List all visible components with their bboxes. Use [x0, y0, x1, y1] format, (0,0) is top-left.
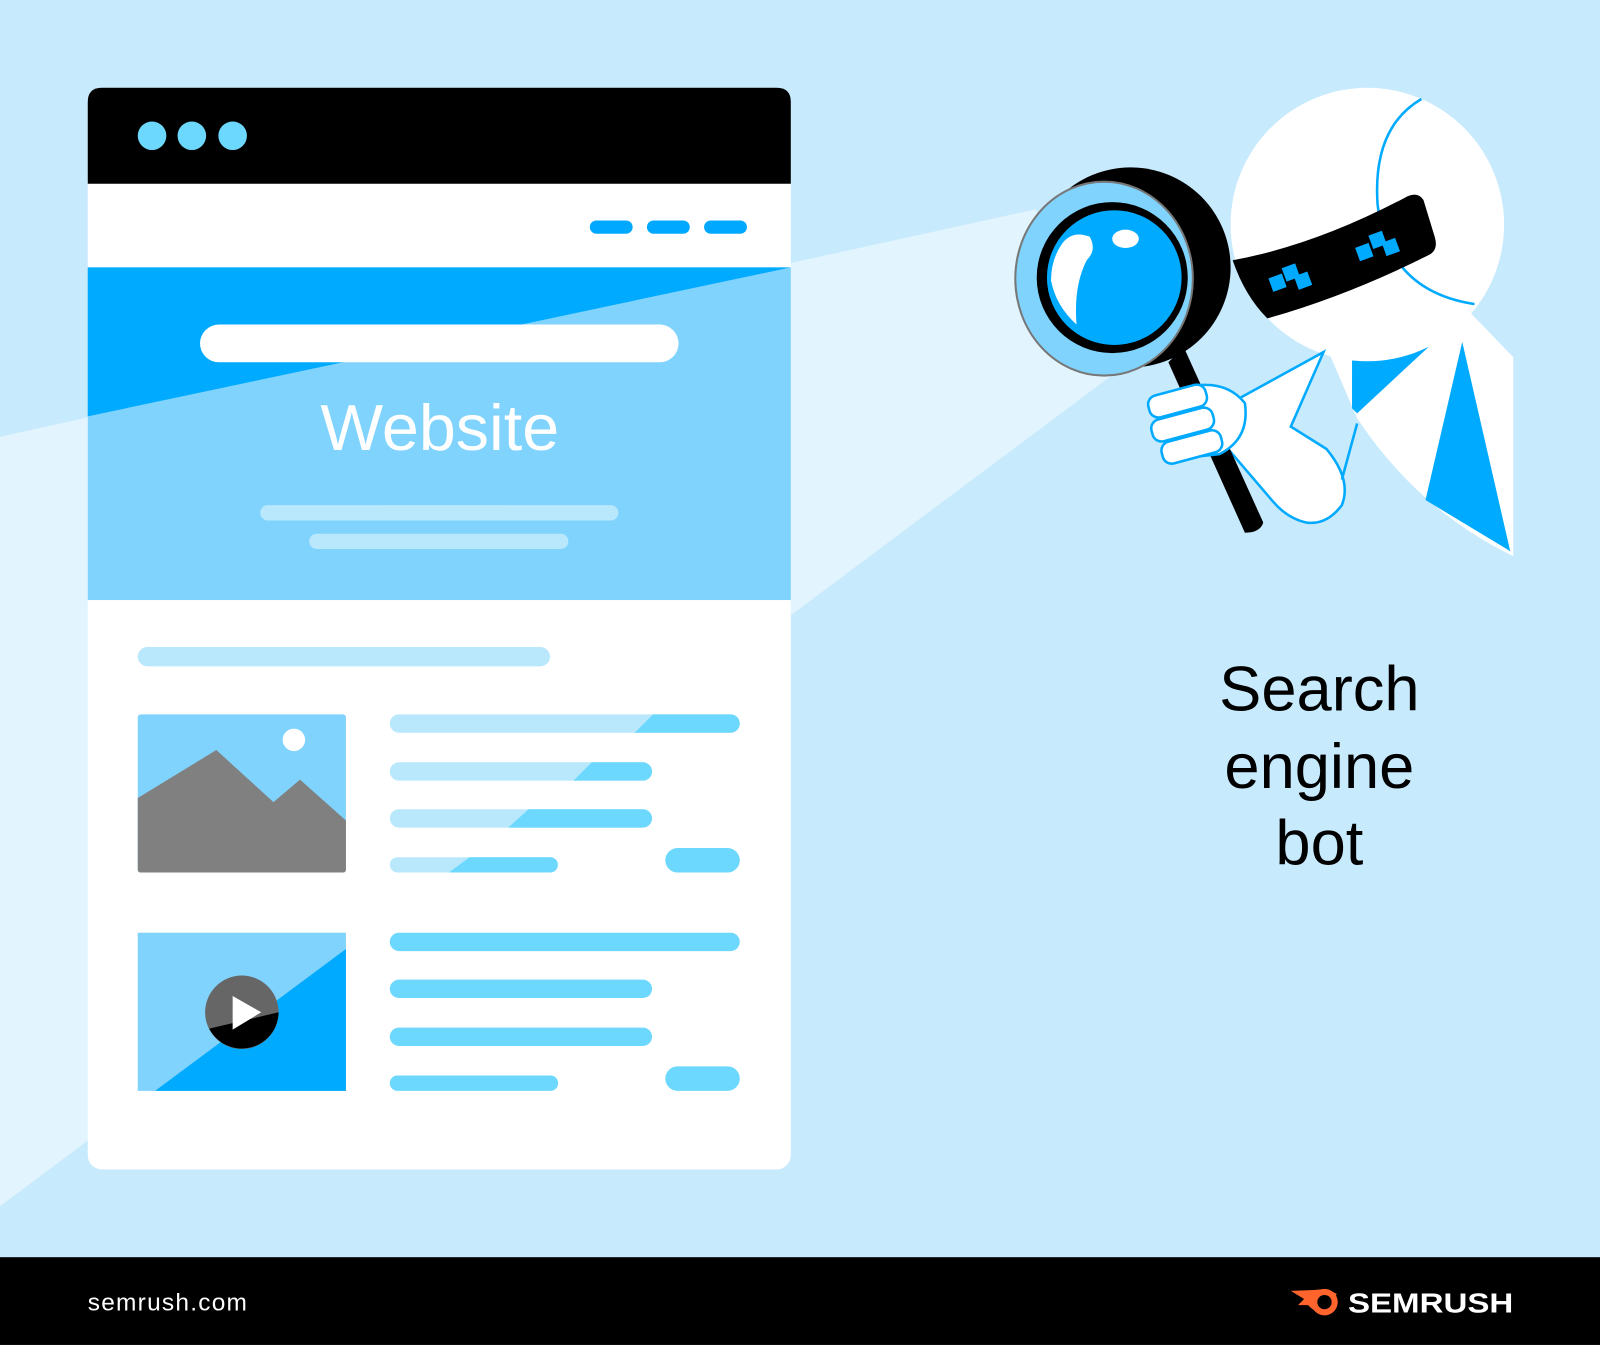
website browser window [88, 88, 791, 1169]
footer url: semrush.com [88, 1289, 247, 1316]
robot body [1327, 301, 1513, 556]
semrush logo: SEMRUSH [1348, 1287, 1513, 1318]
arm [1219, 352, 1345, 523]
label: search engine bot: bot [1275, 808, 1364, 878]
text rows 1 [390, 714, 740, 873]
content heading bar [138, 647, 550, 666]
semrush logo [1291, 1287, 1513, 1318]
hero section [88, 267, 791, 600]
magnifier handle [1168, 347, 1263, 533]
hand [1146, 383, 1246, 466]
image thumbnail [138, 714, 346, 872]
footer [0, 1257, 1600, 1345]
search bar [200, 325, 679, 362]
browser top bar [88, 88, 791, 184]
label: search engine bot: Search [1219, 654, 1420, 724]
robot bot illustration [1015, 88, 1513, 556]
text rows 2 [390, 933, 740, 1091]
magnifier [1031, 167, 1231, 367]
video thumbnail [138, 933, 346, 1091]
nav links [590, 220, 747, 234]
robot head [1231, 88, 1504, 361]
label: search engine bot: engine [1224, 732, 1414, 802]
light beam [0, 209, 1122, 1206]
visor [1233, 195, 1436, 318]
hero title: Website [320, 391, 559, 464]
